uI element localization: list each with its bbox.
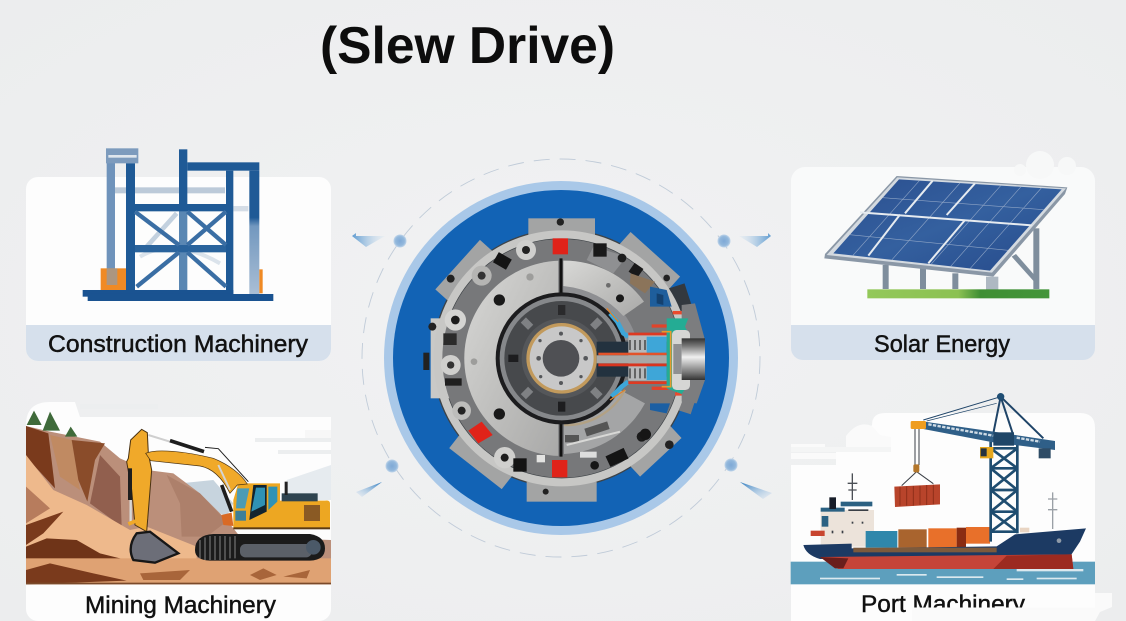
silver plate left half [464,261,558,456]
label: Port Machinery [861,591,1025,618]
stick arm [127,429,152,532]
cliff shadow [167,475,227,537]
label band [26,325,331,361]
crane tower [991,442,1017,542]
panel: construction machinery [26,148,331,361]
arrow bottom left [356,482,382,497]
bucket [131,532,178,563]
lower right exposed ribs [564,390,645,454]
blue disc [393,190,729,526]
central slew drive diagram [352,159,772,557]
label band [791,325,1095,360]
cloud [1014,151,1076,179]
cloud and streaks [791,424,891,459]
dark rock face [26,426,55,488]
outer steel ring [438,234,686,482]
cells [833,179,1062,271]
outer light blue ring [384,181,738,535]
ground [26,558,331,584]
illustration: excavator in quarry [26,411,331,584]
gear mechanism [423,218,705,502]
inner dark ring [496,292,628,424]
connector dots and arrows [352,233,772,499]
arrow top right [739,233,771,247]
dot bottom left [386,460,398,472]
grass [867,289,1049,298]
dot top right [718,234,730,248]
card [26,177,331,361]
silver plate right segment [563,261,644,316]
trees [27,411,77,437]
cargo containers [866,531,897,548]
arrow bottom right [740,482,772,499]
icon: solar panel [824,176,1067,298]
ship hull [803,528,1086,559]
inner grey band behind right plate [563,285,637,340]
frame [824,176,1067,277]
arrow top left [352,233,385,247]
label smudge [912,593,1112,621]
lug bolt holes [423,218,674,495]
label: Solar Energy [874,331,1010,358]
rib details [564,387,651,445]
cliff [26,426,331,584]
upper body [233,483,330,528]
tan bearing ring [526,323,597,394]
illustration: port crane and cargo ship [791,393,1095,584]
mounting lugs [431,218,705,502]
title: (Slew Drive) [320,17,615,75]
inner compartment ring [442,239,681,478]
label: Construction Machinery [48,331,308,358]
hydraulic cylinders [130,435,248,522]
drive shaft cross section [597,303,705,403]
center split line [556,258,565,457]
crane mast and stays [923,397,1043,438]
card [26,402,331,621]
ship superstructure [821,510,874,547]
sand slope [26,455,197,560]
distant hill [180,480,233,517]
link [128,517,147,524]
water [791,562,1095,584]
hub bolts [536,332,588,385]
dot bottom right [724,458,738,472]
card [791,167,1095,360]
sky streaks [80,404,331,454]
hub centre [543,340,579,377]
compartments [441,240,672,472]
card [791,413,1095,621]
boom [146,451,247,493]
panel: port machinery [791,393,1112,621]
crane cab [980,447,993,458]
cab windows [236,488,249,508]
thick dividers [860,181,1032,263]
tracks [195,534,325,561]
dark backing [432,229,691,488]
dashed orbit ring [362,159,760,557]
icon: steel frame [83,148,273,301]
supports [883,228,1039,294]
dot top left [394,234,406,248]
plate holes [471,273,624,420]
label: Mining Machinery [85,592,276,619]
inner grey ring with ticks [504,301,619,416]
crane jib [920,421,1055,450]
red blocks [468,238,568,477]
hoist and cargo [902,429,933,486]
mast [1048,492,1057,529]
panel: solar energy [791,151,1095,360]
panel: mining machinery [26,402,331,621]
